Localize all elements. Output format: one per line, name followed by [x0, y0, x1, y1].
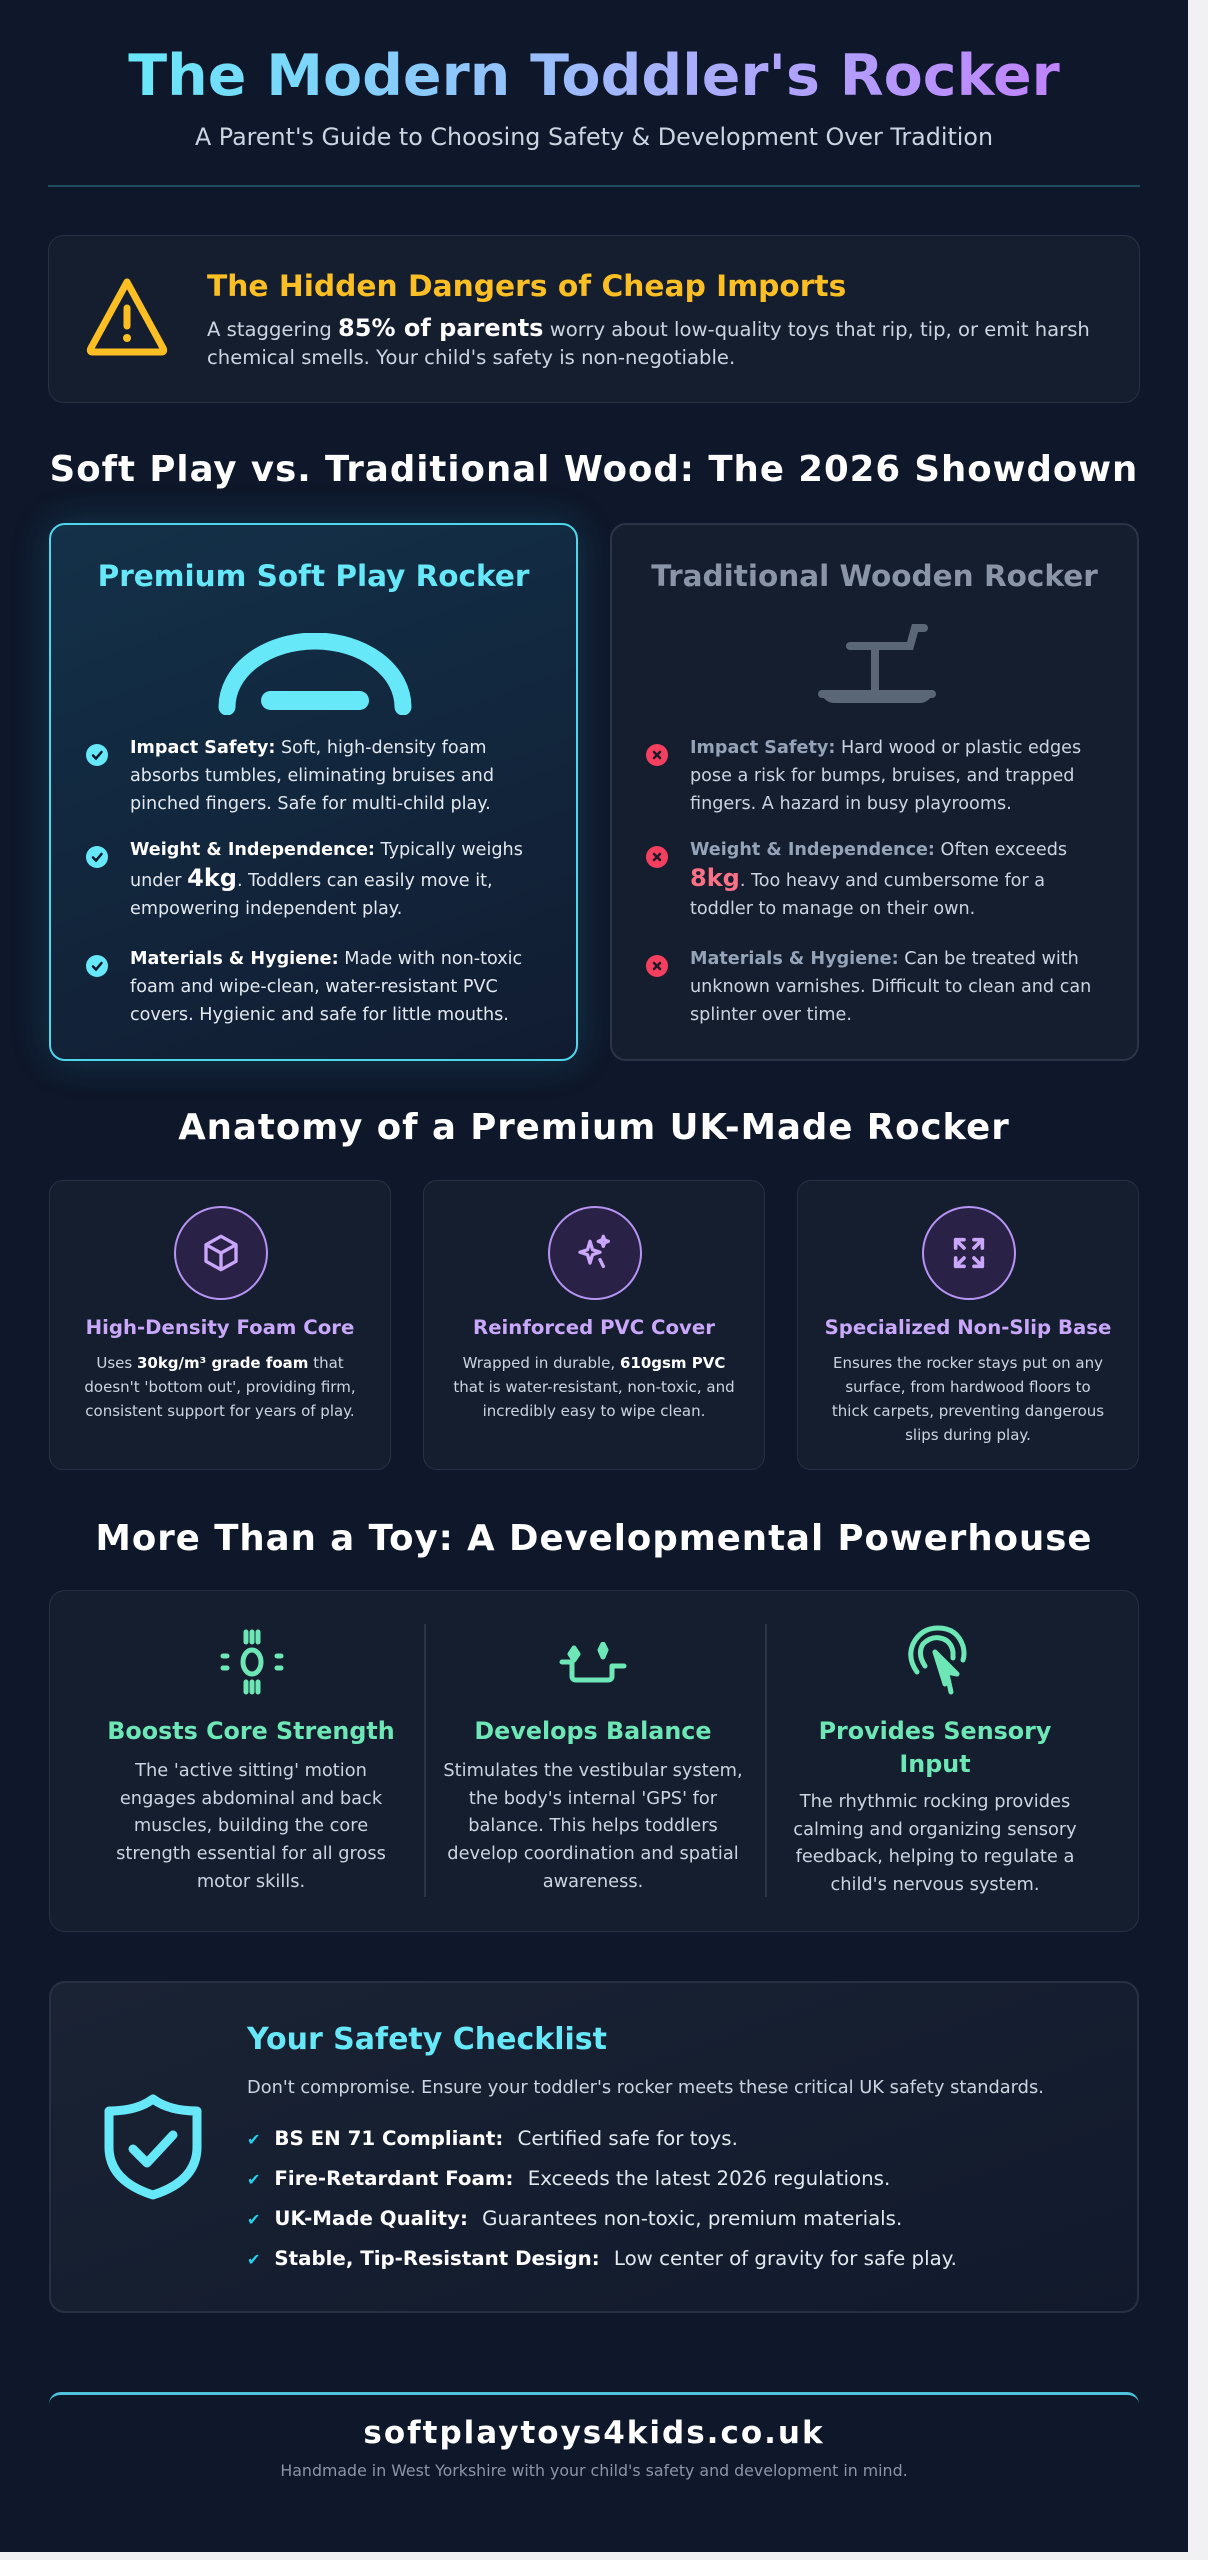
footer domain: softplaytoys4kids.co.uk	[363, 2415, 825, 2451]
item: impact safety: Impact Safety: Hard wood or plastic edges pose a risk for bumps, bruises, and trapped fingers. A hazard in busy playrooms.	[690, 738, 1081, 814]
feature card: foam core	[49, 1180, 391, 1470]
footer	[49, 2392, 1139, 2532]
item: weight: Weight & Independence: Often exceeds 8kg. Too heavy and cumbersome for a toddler to manage on their own.	[690, 840, 1067, 919]
icon: check 2	[86, 846, 108, 868]
icon: cross 3	[646, 955, 668, 977]
benefit: sensory	[793, 1626, 1077, 1895]
checklist items	[247, 2127, 957, 2270]
feature title: Reinforced PVC Cover	[473, 1316, 715, 1339]
icon: soft rocker	[218, 633, 412, 715]
item: weight: Weight & Independence: Typically weighs under 4kg. Toddlers can easily move it, empowering independent play.	[130, 840, 523, 919]
benefit title: Develops Balance	[474, 1717, 712, 1745]
feature title: Specialized Non-Slip Base	[825, 1316, 1111, 1339]
item: materials: Materials & Hygiene: Made with non-toxic foam and wipe-clean, water-resistant PVC covers. Hygienic and safe for little mouths.	[130, 949, 522, 1025]
benefit title: Provides Sensory	[819, 1717, 1051, 1745]
benefit: balance	[443, 1642, 743, 1892]
text: ✔ Fire-Retardant Foam: Exceeds the latest 2026 regulations.	[247, 2167, 890, 2190]
benefit text: The 'active sitting' motion engages abdominal and back muscles, building the core strength essential for all gross motor skills.	[116, 1760, 386, 1892]
icon: cube	[174, 1206, 268, 1300]
text: ✔ UK-Made Quality: Guarantees non-toxic, premium materials.	[247, 2207, 902, 2230]
checklist intro: Don't compromise. Ensure your toddler's rocker meets these critical UK safety standards.	[247, 2077, 1044, 2098]
benefit title: Input	[899, 1750, 971, 1778]
panel: safety checklist	[49, 1981, 1139, 2313]
warning heading: The Hidden Dangers of Cheap Imports	[207, 269, 846, 304]
feature title: High-Density Foam Core	[86, 1316, 354, 1339]
heading: anatomy: Anatomy of a Premium UK-Made Rocker	[178, 1107, 1010, 1148]
feature text: Ensures the rocker stays put on any surface, from hardwood floors to thick carpets, preventing dangerous slips during play.	[832, 1354, 1104, 1444]
subtitle: A Parent's Guide to Choosing Safety & Development Over Tradition	[195, 123, 993, 151]
icon: sparkles	[548, 1206, 642, 1300]
item: materials: Materials & Hygiene: Can be treated with unknown varnishes. Difficult to clean and can splinter over time.	[690, 949, 1091, 1025]
panel: hidden dangers warning	[48, 235, 1140, 403]
icon: check 3	[86, 955, 108, 977]
icon: check 1	[86, 744, 108, 766]
panel: traditional wooden rocker	[610, 523, 1139, 1061]
warning text: A staggering 85% of parents worry about low-quality toys that rip, tip, or emit harsh chemical smells. Your child's safety is non-negotiable.	[207, 314, 1090, 369]
icon: balance	[560, 1642, 626, 1682]
benefit text: The rhythmic rocking provides calming and organizing sensory feedback, helping to regulate a child's nervous system.	[793, 1791, 1077, 1895]
title: The Modern Toddler's Rocker	[128, 43, 1060, 109]
benefit text: Stimulates the vestibular system, the body's internal 'GPS' for balance. This helps toddlers develop coordination and spatial awareness.	[443, 1760, 743, 1892]
benefit: core strength	[107, 1630, 395, 1892]
icon: wooden rocker	[818, 624, 936, 703]
icon: warning triangle	[86, 278, 168, 356]
card title: Premium Soft Play Rocker	[98, 559, 529, 593]
footer tagline: Handmade in West Yorkshire with your child's safety and development in mind.	[280, 2461, 908, 2480]
icon: cross 1	[646, 744, 668, 766]
card title: Traditional Wooden Rocker	[651, 559, 1098, 593]
text: ✔ BS EN 71 Compliant: Certified safe for toys.	[247, 2127, 738, 2150]
icon: shield	[104, 2094, 202, 2200]
panel: premium soft play rocker	[49, 523, 578, 1061]
feature text: Uses 30kg/m³ grade foam that doesn't 'bottom out', providing firm, consistent support for years of play.	[84, 1354, 356, 1420]
text: ✔ Stable, Tip-Resistant Design: Low center of gravity for safe play.	[247, 2247, 957, 2270]
feature card: pvc cover	[423, 1180, 765, 1470]
item: impact safety: Impact Safety: Soft, high-density foam absorbs tumbles, eliminating bruises and pinched fingers. Safe for multi-child play.	[130, 738, 494, 814]
icon: core	[220, 1630, 284, 1694]
icon: cross 2	[646, 846, 668, 868]
checklist title: Your Safety Checklist	[247, 2022, 607, 2057]
icon: expand arrows	[922, 1206, 1016, 1300]
panel: developmental benefits	[49, 1590, 1139, 1932]
icon: sensory touch	[908, 1626, 966, 1694]
feature card: non-slip base	[797, 1180, 1139, 1470]
heading: developmental: More Than a Toy: A Developmental Powerhouse	[96, 1518, 1092, 1559]
benefit title	[819, 1717, 1051, 1778]
feature text: Wrapped in durable, 610gsm PVC that is water-resistant, non-toxic, and incredibly easy to wipe clean.	[453, 1354, 735, 1420]
heading: showdown: Soft Play vs. Traditional Wood: The 2026 Showdown	[50, 449, 1138, 490]
benefit title: Boosts Core Strength	[107, 1717, 395, 1745]
